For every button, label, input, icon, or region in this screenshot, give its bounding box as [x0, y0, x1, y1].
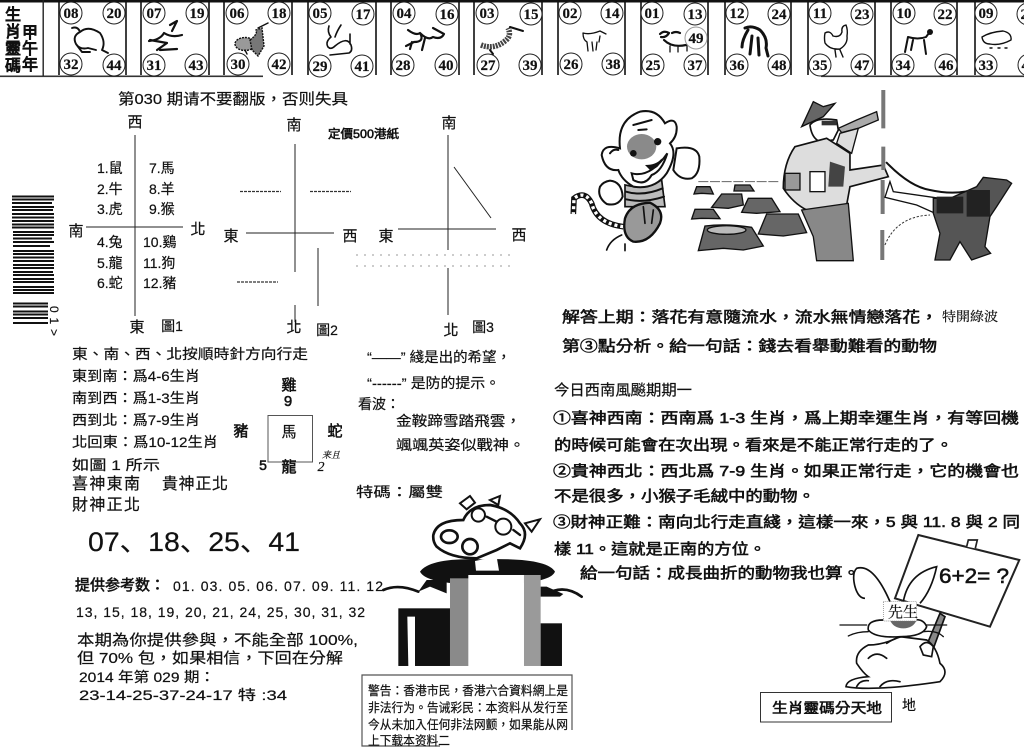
- cell: goat 02 14 26 38: [558, 2, 625, 75]
- cell: monkey 12 24 36 48: 24: [772, 7, 787, 23]
- figure 3: compass with diagonal line: 圖3: [472, 319, 494, 335]
- figure 2: compass with dashed lines: 北: [286, 319, 302, 336]
- clockwise rules text block: 貴神正北: [162, 475, 228, 493]
- header strip: zodiac number table: [0, 0, 1024, 77]
- zodiac cross diagram: 蛇: [327, 423, 343, 440]
- zodiac list: 11.狗: [143, 255, 175, 271]
- header label: 生肖靈碼 甲午年: [5, 0, 44, 76]
- cell: goat 02 14 26 38: 14: [604, 6, 620, 22]
- clockwise rules text block: 東、南、西、北按順時針方向行走: [72, 346, 308, 362]
- zodiac cross diagram: 2: [318, 460, 324, 475]
- warning box: 非法行为。告诫彩民：本资料从发行至: [368, 700, 568, 715]
- figure 3: compass with diagonal line: 東: [378, 228, 394, 245]
- cell: monkey 12 24 36 48: 36: [730, 58, 745, 74]
- zodiac cross diagram: 豬: [233, 423, 249, 440]
- figure 1: compass with zodiac list: 南: [68, 223, 84, 240]
- figure 2: compass with dashed lines: [223, 117, 358, 338]
- cell: goat 02 14 26 38: 02: [562, 6, 578, 22]
- analysis text block: [553, 382, 1020, 582]
- clockwise rules text block: 喜神東南: [72, 475, 140, 493]
- analysis text block: ①喜神西南：西南爲 1-3 生肖，爲上期幸運生肖，有等回機: [553, 409, 1019, 427]
- cell: snake 03 15 27 39: 27: [480, 58, 496, 74]
- analysis text block: 給一句話：成長曲折的動物我也算。: [580, 565, 860, 582]
- figure 1: compass with zodiac list: 圖1: [161, 318, 183, 334]
- zodiac list: 10.鷄: [143, 234, 176, 250]
- analysis text block: ③財神正難：南向北行走直綫，這樣一來，5 與 11. 8 與 2 同: [553, 513, 1020, 531]
- analysis text block: ②貴神西北：西北爲 7-9 生肖。如果正常行走，它的機會也: [553, 462, 1019, 480]
- cell: rooster 11 23 35 47: [808, 2, 875, 76]
- footer character: 地: [902, 697, 916, 713]
- figure 2: compass with dashed lines: 南: [286, 117, 302, 134]
- cell: rooster 11 23 35 47: 35: [812, 58, 828, 74]
- header label: 生肖靈碼 甲午年: 年: [22, 56, 38, 74]
- figure 3: compass with diagonal line: [356, 115, 527, 339]
- cell: ox 01 13 25 37 49: 25: [646, 58, 660, 74]
- zodiac list: 2.牛: [97, 181, 123, 197]
- analysis text block: 的時候可能會在次出現。看來是不能正常行走的了。: [554, 437, 953, 454]
- header label: 生肖靈碼 甲午年: 甲: [22, 25, 38, 42]
- figure 2: compass with dashed lines: 西: [342, 228, 358, 245]
- reference numbers line one: 01. 03. 05. 06. 07. 09. 11. 12: [173, 578, 383, 594]
- rabbit holding a sign: [840, 535, 1019, 688]
- pot body: [398, 608, 450, 666]
- reference numbers line one: [75, 577, 383, 594]
- cell: tiger 06 18 30 42: [224, 2, 292, 75]
- line legend and poem: 看波：: [358, 396, 400, 412]
- figure 3: compass with diagonal line: 北: [443, 322, 459, 339]
- figure 3: compass with diagonal line: 南: [441, 115, 457, 132]
- zodiac cross diagram: 5: [259, 457, 267, 473]
- issue heading: 第030 期请不要翻版，否则失具: [118, 90, 348, 108]
- line legend and poem: 金鞍蹄雪踏飛雲，: [396, 413, 521, 429]
- clockwise rules text block: 西到北：爲7-9生肖: [72, 412, 200, 428]
- dog peeing on the pole with leash: [885, 163, 1012, 260]
- cell: goat 02 14 26 38: 38: [606, 57, 620, 73]
- cell: snake 03 15 27 39: 15: [524, 7, 538, 23]
- clockwise rules text block: 財神正北: [72, 496, 140, 514]
- cell: dragon 04 16 28 40: 16: [440, 7, 455, 23]
- cell: rat 08 20 32 44: 08: [64, 6, 78, 22]
- cell: ox 01 13 25 37 49: [641, 2, 708, 76]
- cell: dog 10 22 34 46: 34: [896, 58, 911, 74]
- cell: monkey 12 24 36 48: 48: [772, 58, 786, 74]
- cell: dog 10 22 34 46: 10: [896, 6, 912, 22]
- cell: dragon 04 16 28 40: 04: [396, 6, 412, 22]
- eye mask label: [883, 602, 917, 621]
- sign board: [895, 535, 1019, 676]
- cell: tiger 06 18 30 42: 30: [230, 57, 246, 73]
- measuring pole: [876, 90, 889, 260]
- participation note: [77, 632, 358, 703]
- cell: tiger 06 18 30 42: 18: [272, 6, 286, 22]
- footer label box: [760, 692, 892, 722]
- warning box: [362, 675, 572, 748]
- cell: rat 08 20 32 44: 20: [106, 6, 122, 22]
- clockwise rules text block: 如圖 1 所示: [72, 457, 160, 473]
- zodiac list: 1.鼠: [97, 160, 123, 176]
- analysis text block: 樣 11。這就是正南的方位。: [554, 540, 766, 558]
- zodiac cross diagram: 龍: [281, 459, 297, 476]
- zodiac list: 7.馬: [149, 160, 175, 176]
- figure 1: compass with zodiac list: [68, 114, 206, 336]
- cell: rabbit 05 17 29 41: 05: [312, 6, 328, 22]
- price label: 定價500港紙: [328, 126, 399, 141]
- zodiac cross diagram: 9: [284, 393, 292, 410]
- cell: pig 09 21 33 45: 33: [978, 58, 994, 74]
- participation note: 2014 年第 029 期：: [79, 669, 215, 685]
- cell: dog 10 22 34 46: 46: [938, 58, 954, 74]
- cow head: [433, 496, 540, 558]
- figure 2: compass with dashed lines: 東: [223, 228, 239, 245]
- cell: rabbit 05 17 29 41: 29: [312, 59, 328, 75]
- cell: ox 01 13 25 37 49: 37: [688, 58, 703, 74]
- zodiac cross diagram: 馬: [281, 424, 297, 441]
- cell: rat 08 20 32 44: 44: [106, 58, 122, 74]
- rabbit body: [840, 567, 947, 688]
- cell: rooster 11 23 35 47: 11: [813, 6, 827, 22]
- footer label box: 生肖靈碼分天地: [772, 700, 882, 716]
- header label: 生肖靈碼 甲午年: 午: [22, 40, 38, 58]
- cell: rooster 11 23 35 47: 23: [854, 7, 870, 23]
- pot handles: [383, 587, 582, 597]
- mask text: 先生: [888, 604, 918, 621]
- cell: dragon 04 16 28 40: [391, 2, 459, 76]
- reference numbers line two: 13, 15, 18, 19, 20, 21, 24, 25, 30, 31, 32: [76, 604, 365, 620]
- cell: rat 08 20 32 44: [59, 2, 126, 76]
- cell: dog 10 22 34 46: 22: [938, 7, 952, 23]
- line legend and poem: [358, 349, 525, 453]
- third point hint: 第③點分析。給一句話：錢去看舉動難看的動物: [562, 337, 937, 355]
- participation note: 23-14-25-37-24-17 特 :34: [79, 687, 287, 703]
- cell: dog 10 22 34 46: [891, 2, 957, 76]
- pot rim: [420, 559, 555, 584]
- cell: dragon 04 16 28 40: 28: [396, 58, 410, 74]
- zodiac list: 5.龍: [97, 255, 123, 271]
- cell: horse 07 19 31 43: [141, 2, 209, 76]
- cell: horse 07 19 31 43: 19: [190, 6, 204, 22]
- zodiac cross diagram: 来且: [322, 450, 340, 460]
- tree stumps: [692, 182, 807, 251]
- cell: ox 01 13 25 37 49: 49: [688, 31, 704, 47]
- cell: snake 03 15 27 39: 03: [480, 6, 494, 22]
- analysis text block: 不是很多，小猴子毛絨中的動物。: [554, 487, 815, 505]
- zodiac list: 4.兔: [97, 234, 123, 250]
- last-issue answer: 解答上期：落花有意隨流水，流水無情戀落花，: [562, 308, 938, 326]
- cell: monkey 12 24 36 48: 12: [730, 6, 744, 22]
- warning box: 上下载本资料二: [368, 734, 450, 748]
- cell: ox 01 13 25 37 49: 13: [688, 7, 702, 23]
- zodiac list: [97, 160, 176, 291]
- figure 1: compass with zodiac list: 北: [190, 221, 206, 238]
- cell: goat 02 14 26 38: 26: [564, 57, 579, 73]
- cell: dragon 04 16 28 40: 40: [438, 58, 454, 74]
- cell: rabbit 05 17 29 41: [308, 2, 376, 77]
- zodiac cross diagram: [233, 377, 343, 476]
- zodiac cross diagram: 雞: [281, 377, 297, 394]
- clockwise rules text block: 北回東：爲10-12生肖: [72, 434, 218, 450]
- cell: ox 01 13 25 37 49: 01: [644, 6, 660, 22]
- header label: 生肖靈碼 甲午年: 碼: [5, 57, 21, 75]
- participation note: 本期為你提供參與，不能全部 100%,: [77, 632, 358, 649]
- line legend and poem: “——” 綫是出的希望，: [367, 349, 511, 365]
- cell: tiger 06 18 30 42: 42: [272, 57, 286, 73]
- cow head in a cooking pot: [383, 496, 582, 666]
- cell: snake 03 15 27 39: [474, 2, 542, 76]
- warning box: 今从未加入任何非法网颤，如果能从网: [368, 717, 568, 732]
- cell: pig 09 21 33 45: [975, 2, 1024, 76]
- zodiac list: 9.猴: [149, 201, 175, 217]
- header label: 生肖靈碼 甲午年: 肖: [5, 23, 21, 41]
- reference numbers line one: 提供参考数：: [75, 577, 165, 594]
- cell: horse 07 19 31 43: 31: [146, 58, 162, 74]
- highlighted numbers: 07、18、25、41: [88, 527, 300, 557]
- cell: horse 07 19 31 43: 43: [188, 58, 204, 74]
- cell: monkey 12 24 36 48: [725, 2, 791, 76]
- line legend and poem: “------” 是防的提示。: [367, 375, 500, 391]
- forester drinking from a bottle: [783, 102, 888, 261]
- barcode: [12, 196, 61, 336]
- zodiac list: 3.虎: [97, 201, 123, 217]
- participation note: 但 70% 包，如果相信，下回在分解: [77, 650, 343, 667]
- cell: rabbit 05 17 29 41: 17: [356, 7, 371, 23]
- cell: rooster 11 23 35 47: 47: [854, 58, 870, 74]
- zodiac list: 6.蛇: [97, 275, 123, 291]
- header label: 生肖靈碼 甲午年: 靈: [5, 41, 21, 58]
- cell: pig 09 21 33 45: 09: [978, 6, 994, 22]
- cell: horse 07 19 31 43: 07: [146, 6, 162, 22]
- cell: tiger 06 18 30 42: 06: [230, 6, 245, 22]
- cell: rat 08 20 32 44: 32: [64, 57, 78, 73]
- figure 1: compass with zodiac list: 東: [129, 319, 145, 336]
- monkey-tiger mascot: [573, 111, 699, 251]
- special note: 特開綠波: [942, 309, 998, 324]
- line legend and poem: 颯颯英姿似戰神。: [396, 437, 525, 453]
- sign sum: 6+2= ?: [939, 565, 1009, 588]
- analysis text block: 今日西南風飈期期一: [554, 382, 692, 399]
- zodiac list: 8.羊: [149, 181, 175, 197]
- cell: snake 03 15 27 39: 39: [522, 58, 538, 74]
- warning box: 警告：香港市民，香港六合資料網上是: [368, 683, 568, 698]
- clockwise rules text block: 東到南：爲4-6生肖: [72, 368, 200, 384]
- barcode digits: 01>: [47, 306, 61, 336]
- clockwise rules text block: [72, 346, 308, 514]
- figure 3: compass with diagonal line: 西: [511, 227, 527, 244]
- header label: 生肖靈碼 甲午年: 生: [5, 6, 21, 24]
- zodiac list: 12.豬: [143, 275, 176, 291]
- figure 2: compass with dashed lines: 圖2: [316, 322, 338, 338]
- cell: rabbit 05 17 29 41: 41: [354, 59, 370, 75]
- special code: 特碼：屬雙: [356, 484, 443, 500]
- figure 1: compass with zodiac list: 西: [127, 114, 143, 131]
- clockwise rules text block: 南到西：爲1-3生肖: [72, 390, 200, 406]
